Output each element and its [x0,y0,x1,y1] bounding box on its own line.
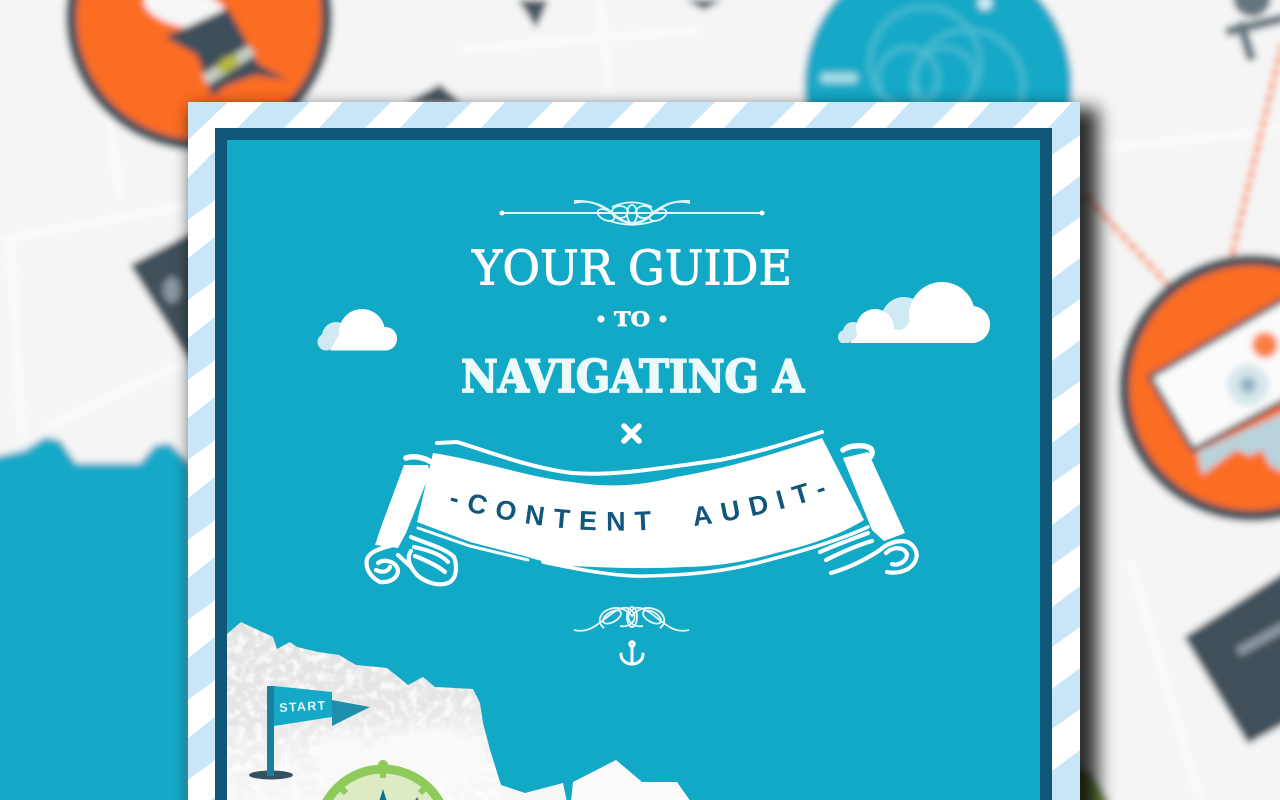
icon: anchor [621,642,643,664]
title: your guide: YOUR GUIDE [471,240,792,296]
sign: left dark board [130,228,200,378]
ornament: lower flourish [574,607,689,631]
title: to, with dots: TO [614,307,650,331]
left teal sea [0,437,192,800]
card shadow [192,108,1098,800]
left roll [367,457,456,584]
green land, lower right [1070,765,1114,800]
icon: right orange circle with chart card [1124,260,1280,516]
icon: left cloud [318,309,397,355]
ornament: top flourish line [500,201,764,225]
icon: right cloud [838,282,990,348]
map: coastline land [227,620,691,800]
striped border [188,102,1080,800]
icon: start flag [249,686,370,780]
icon: top left orange circle with pirate figure [71,0,327,145]
flag label: START [279,699,326,715]
sign: right dark board [1184,562,1280,744]
ribbon edge lines [418,432,868,576]
title: to, with dots [598,307,666,331]
banner text: content audit: -CONTENT AUDIT- [450,482,825,531]
icon: compass [318,760,448,800]
icon: top teal circle with overlapping rings [804,0,1072,220]
ribbon body [417,438,864,568]
icon: small dark marks above card [405,0,722,104]
panel: poster card [188,102,1080,800]
right roll [820,446,917,573]
icon: cross mark [624,426,639,441]
banner: scroll ribbon [364,430,919,586]
frame and sea [221,134,1046,800]
dashed route: orange lines [1085,45,1280,285]
title: navigating a: NAVIGATING A [461,350,805,403]
icon: skull and crossbones, top right [1226,0,1280,60]
